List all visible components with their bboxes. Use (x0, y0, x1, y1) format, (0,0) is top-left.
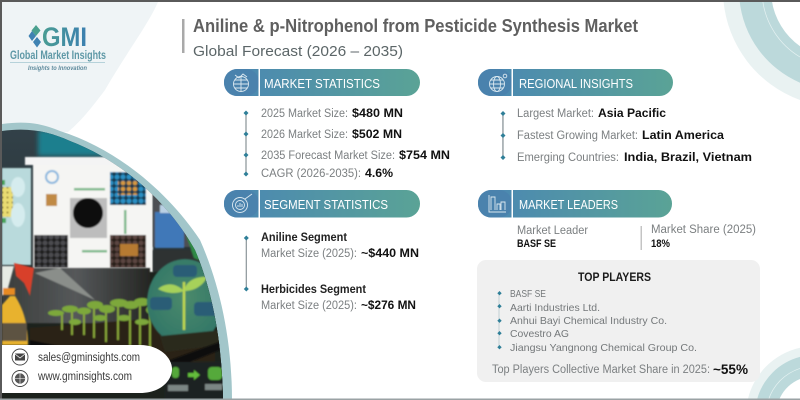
insight: fastest growing: Latin America (642, 130, 725, 142)
chemistry diagram panel (25, 157, 153, 273)
panel: market leaders (478, 190, 756, 250)
logo name: Global Market Insights (10, 50, 106, 62)
collective share: ~55% (713, 362, 748, 377)
heading pill: MARKET LEADERS (519, 197, 618, 212)
insight: emerging countries: India, Brazil, Vietnam (624, 152, 752, 164)
panel: segment statistics (224, 190, 420, 312)
timeline (244, 110, 248, 176)
stat: 2025 market size: $480 MN (352, 108, 403, 120)
segment: aniline: ~$440 MN (361, 248, 419, 260)
insight: emerging countries (517, 152, 752, 164)
logo tagline: Insights to Innovation (28, 65, 87, 72)
icon: email (12, 349, 28, 365)
segment: aniline: Aniline Segment (261, 232, 347, 244)
segment: herbicides: Market Size (2025): (261, 300, 357, 312)
icon: target chart (232, 194, 252, 212)
heading pill: REGIONAL INSIGHTS (519, 76, 633, 91)
teal blurred top photo (36, 131, 103, 157)
stat: 2026 market size: 2026 Market Size: (261, 129, 348, 141)
icon: globe (490, 74, 507, 92)
segment: herbicides: ~$276 MN (361, 300, 416, 312)
insight: fastest growing: Fastest Growing Market: (517, 130, 638, 142)
GMI logo (10, 22, 106, 72)
player list: Anhui Bayi Chemical Industry Co. (510, 315, 667, 327)
stat: 2025 market size: 2025 Market Size: (261, 108, 348, 120)
stat: 2025 market size (261, 108, 403, 120)
player list: Jiangsu Yangnong Chemical Group Co. (510, 342, 697, 354)
segment: aniline: Market Size (2025): (261, 248, 357, 260)
email address: sales@gminsights.com (38, 352, 140, 364)
stat: 2035 forecast: 2035 Forecast Market Size: (261, 150, 395, 162)
stat: 2026 market size (261, 129, 402, 141)
market share: 18% (651, 238, 670, 250)
heading pill: SEGMENT STATISTICS (264, 197, 388, 212)
top-left pale background shape (2, 2, 158, 132)
photo collage (2, 120, 237, 400)
icon: globe with chart (234, 74, 248, 92)
timeline (244, 236, 249, 292)
icon: city chart (489, 195, 506, 212)
stat: 2035 forecast: $754 MN (399, 150, 450, 162)
title block (182, 16, 638, 60)
market share: Market Share (2025) (651, 224, 756, 236)
tray and bottom strip (166, 342, 223, 395)
timeline (500, 111, 506, 160)
heading pill (478, 69, 673, 96)
website address: www.gminsights.com (37, 371, 132, 383)
stat: CAGR: 4.6% (365, 168, 393, 180)
heading pill (224, 69, 420, 96)
glass dome with seedling (147, 259, 223, 352)
insight: fastest growing (517, 130, 725, 142)
logo letters: GMI (42, 22, 87, 52)
title: Aniline & p-Nitrophenol from Pesticide Synthesis Market (193, 16, 638, 36)
player list: Covestro AG (510, 328, 569, 340)
segment: aniline (261, 232, 419, 260)
panel: market statistics (224, 69, 450, 180)
segment: herbicides (261, 284, 416, 312)
heading pill: MARKET STATISTICS (264, 76, 380, 91)
market leader: BASF SE (517, 238, 556, 250)
player list: Aarti Industries Ltd. (510, 302, 600, 314)
heading: TOP PLAYERS (578, 272, 651, 284)
contact info pill (2, 345, 172, 393)
insight: largest market: Largest Market: (517, 108, 594, 120)
player list (510, 288, 697, 354)
stat: CAGR: CAGR (2026-2035): (261, 168, 361, 180)
panel: regional insights (478, 69, 752, 164)
teal arc ring around photo collage (2, 123, 232, 400)
timeline (497, 291, 502, 349)
market share (651, 224, 756, 250)
light teal left panel with yellow blocks (2, 168, 31, 265)
market leader (517, 225, 588, 250)
stat: 2026 market size: $502 MN (352, 129, 402, 141)
segment: herbicides: Herbicides Segment (261, 284, 366, 296)
market leader: Market Leader (517, 225, 588, 237)
bottle photo (152, 194, 204, 272)
panel: top players (477, 260, 760, 382)
insight: emerging countries: Emerging Countries: (517, 152, 619, 164)
heading pill (478, 190, 672, 218)
insight: largest market (517, 108, 667, 120)
seedlings photo (2, 268, 227, 400)
player list: BASF SE (510, 288, 546, 300)
heading pill (224, 190, 420, 218)
icon: website globe (12, 370, 28, 386)
sprayer bottle (2, 263, 34, 345)
icon: logo diamonds (28, 25, 41, 48)
collective share: Top Players Collective Market Share in 2025: (492, 364, 710, 376)
insight: largest market: Asia Pacific (598, 108, 667, 120)
subtitle: Global Forecast (2026 – 2035) (193, 43, 403, 60)
top-right decorative rings (723, 0, 800, 100)
bottom-right decorative rings (748, 348, 800, 400)
